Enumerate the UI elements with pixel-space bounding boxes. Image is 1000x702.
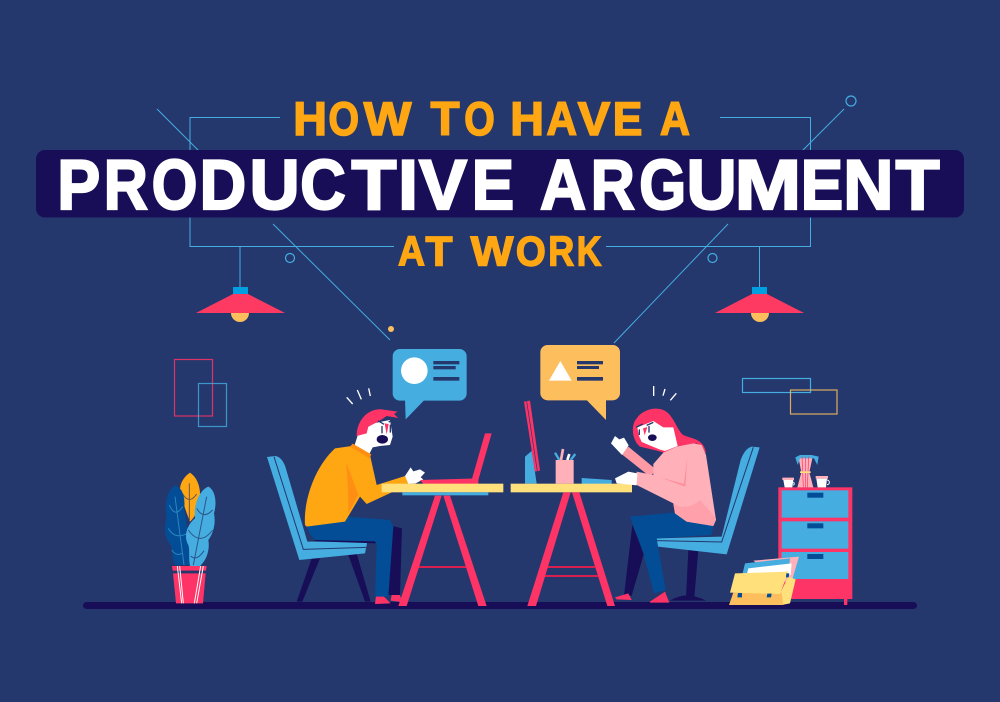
back leg [624,525,644,596]
title line: productive argument: I [398,145,418,224]
tabletop [511,484,632,492]
title line: productive argument: A [540,145,586,224]
title line: productive argument: G [639,145,686,224]
title line: productive argument: D [200,145,246,224]
laptop [472,433,492,480]
title line: productive argument: E [472,145,514,224]
icon: left lamp [196,246,285,322]
floor [83,602,917,609]
decorative frames left [174,360,226,426]
title line: how to have a: H [293,93,327,146]
sweater [637,443,716,526]
mouth [377,435,388,444]
title line: productive argument: V [419,145,467,224]
keyboard [582,478,612,485]
title line: how to have a: T [431,93,460,146]
title line: how to have a: H [510,93,544,146]
decorative circles [286,96,856,262]
mouth [648,434,657,441]
filing cabinet with coffee set and folders [729,455,852,605]
chair leg [686,550,698,597]
title line: how to have a: A [546,93,577,146]
title line: productive argument: T [896,145,940,224]
title line: how to have a: O [464,93,495,146]
title line: at work: R [548,227,574,274]
eyes and brows [378,420,393,433]
hair [633,409,706,453]
cabinet body [778,487,852,599]
face [637,421,678,451]
title line: productive argument: R [591,145,635,224]
title line: how to have a: V [578,93,611,146]
title line: productive argument: M [735,145,801,224]
eyes and brows [636,422,653,435]
man at laptop [267,388,503,606]
tabletop [382,484,503,492]
cups [782,476,828,480]
title line: productive argument: N [843,145,894,224]
table legs [527,492,615,606]
folder stack [753,557,799,582]
crossbar [418,566,467,568]
title line: productive argument: C [300,145,346,224]
back leg [388,526,402,595]
title line: at work: K [577,227,601,274]
title line: how to have a: A [660,93,690,146]
title line: how to have a: W [364,93,412,146]
sweater [305,446,408,527]
crossbars [544,566,598,577]
speech bubble: circle message [393,349,467,419]
raised hand [611,436,629,455]
raised arm [621,447,657,477]
hand [405,467,425,484]
nose [643,427,647,435]
title line: at work: W [471,227,514,274]
drawer handles [807,493,823,498]
dot accent [388,326,394,332]
lower hand [615,472,637,485]
front leg [630,513,713,593]
chair [657,447,760,554]
title line: productive argument: U [250,145,300,224]
front leg [307,517,393,597]
collar [350,444,371,458]
decorative frames right [742,378,837,414]
surprise ticks [347,388,370,404]
hair [357,409,398,436]
title line: productive argument: P [57,145,100,224]
chair legs [297,553,371,602]
speech bubble: triangle message [540,345,620,420]
neck and face [354,420,393,454]
title line: productive argument: R [104,145,148,224]
monitor [524,401,540,472]
title line: productive argument: O [152,145,197,224]
drawers [782,490,848,518]
title line: at work: T [426,227,452,274]
title line: productive argument: E [801,145,843,224]
potted plant [165,473,216,603]
title line: how to have a: O [328,93,359,146]
shoes [615,592,669,603]
title line: at work: O [516,227,546,274]
nose [385,423,389,435]
title banner [36,150,964,218]
title line: productive argument: T [352,145,396,224]
monitor stand [525,451,537,484]
title line: how to have a: E [613,93,642,146]
chair seat and back [267,456,367,560]
pencil cup [556,460,574,484]
icon: right lamp [715,246,804,322]
surprise ticks [654,386,676,400]
coffee pot [797,457,813,487]
desk with monitor and woman [511,386,760,606]
title line: productive argument: U [686,145,737,224]
table legs [398,496,487,606]
pencils [555,453,559,460]
title line: at work: A [398,227,425,274]
shoes [375,595,402,604]
